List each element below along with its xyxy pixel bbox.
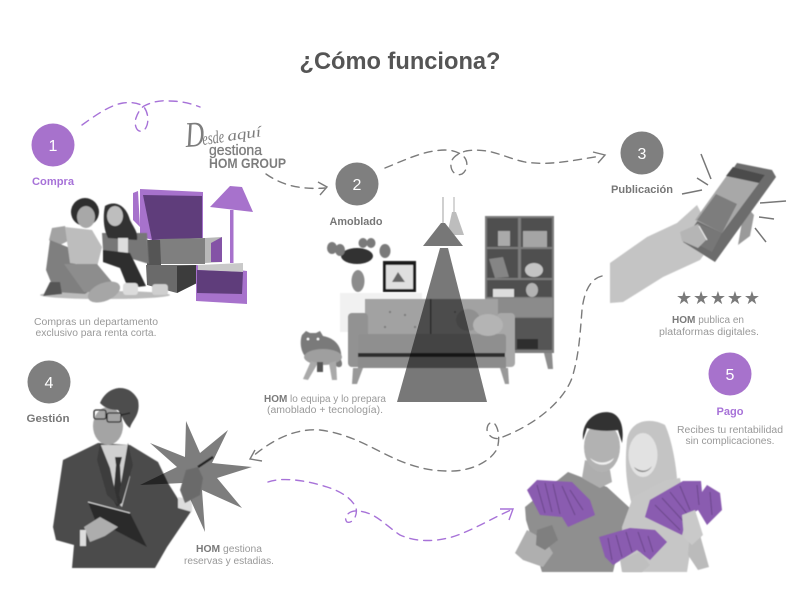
illustration: businessman (53, 388, 192, 568)
note: desde aquí gestiona HOM GROUP: D (183, 114, 206, 155)
text: step 5 description: sin complicaciones. (686, 436, 774, 447)
note: desde aquí gestiona HOM GROUP (183, 114, 286, 171)
dashed arrow: step 2 to step 3 (385, 150, 605, 175)
step 3 badge: 3 (638, 146, 647, 163)
text: step 2 description: HOM lo equipa y lo prepara (264, 394, 386, 405)
step 3 badge (620, 132, 664, 174)
text: step 1 description: exclusivo para renta corta. (36, 328, 156, 339)
text: step 3 description: plataformas digitales. (659, 327, 759, 338)
icon: five stars: ★★★★★ (676, 288, 760, 309)
illustration: sideboard, frame and flowers (327, 238, 422, 332)
note: desde aquí gestiona HOM GROUP: HOM GROUP (209, 155, 286, 171)
icon: phone rays (682, 154, 786, 242)
note: desde aquí gestiona HOM GROUP: esde (201, 126, 225, 149)
text: step 3 description: HOM publica en (672, 315, 744, 326)
illustration: hanging lamps (423, 197, 464, 246)
dashed path: step 1 to note (82, 101, 200, 131)
illustration: boxes and lamp (133, 186, 253, 304)
note: desde aquí gestiona HOM GROUP: aquí (226, 124, 265, 145)
step 5 label: Pago (716, 406, 744, 418)
step 1 badge (32, 124, 74, 166)
illustration: fans of purple banknotes (527, 480, 722, 572)
step 3 label: Publicación (611, 184, 673, 196)
step 4 label: Gestión (26, 413, 70, 425)
text: step 4 description: reservas y estadias. (184, 556, 274, 567)
icon: starburst (140, 421, 252, 532)
dashed arrow: step 3 to step 4 (250, 276, 602, 471)
step 5 badge: 5 (726, 367, 735, 384)
illustration: couple with money (515, 412, 709, 572)
step 2 badge (336, 162, 378, 206)
step 2 label: Amoblado (330, 216, 383, 228)
dashed arrow: note to step 2 (266, 174, 327, 195)
step 4 badge: 4 (45, 375, 54, 392)
text: step 4 description: HOM gestiona (196, 544, 261, 555)
illustration: pointing hand and pen (180, 457, 213, 503)
title: ¿Cómo funciona? (300, 48, 500, 75)
step 1 label: Compra (32, 176, 75, 188)
step 4 badge (28, 360, 70, 404)
step 2 badge: 2 (353, 177, 362, 194)
illustration: light beam (397, 248, 487, 402)
text: step 5 description: Recibes tu rentabilidad (677, 425, 783, 436)
illustration: seated couple (40, 198, 170, 307)
dashed arrow: step 4 to step 5 (268, 480, 513, 541)
text: step 1 description: Compras un departamento (34, 317, 158, 328)
step 5 badge (708, 352, 752, 396)
illustration: sofa (348, 299, 515, 384)
text: step 2 description: (amoblado + tecnología). (267, 405, 383, 416)
illustration: hand holding phone (610, 163, 776, 303)
step 1 badge: 1 (49, 138, 58, 155)
note: desde aquí gestiona HOM GROUP: gestiona (209, 143, 263, 159)
illustration: bookshelf (485, 216, 554, 369)
illustration: cat stool (301, 331, 342, 380)
